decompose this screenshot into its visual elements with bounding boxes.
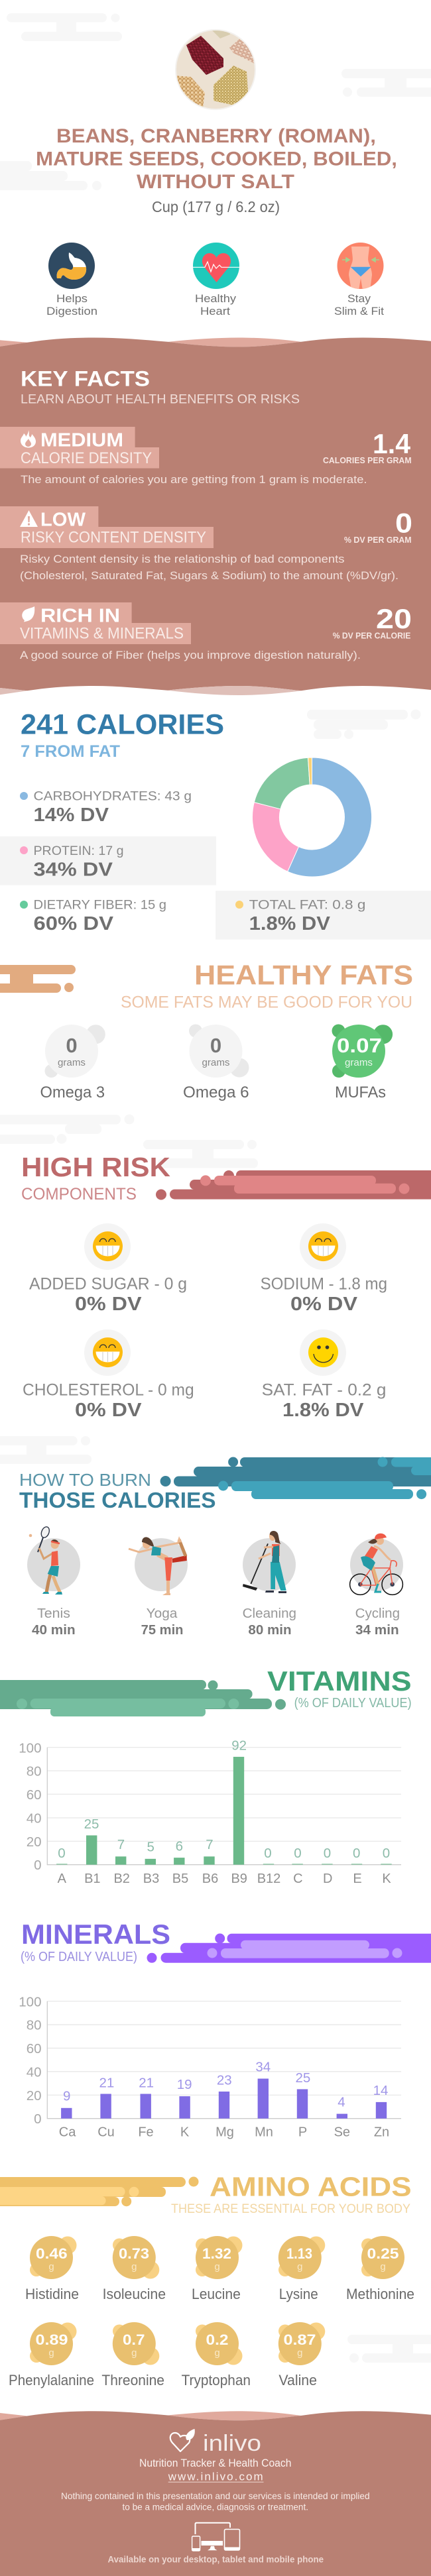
amino acid: leucine (192, 2236, 243, 2302)
activity: cycling: Cycling (355, 1606, 400, 1621)
risk: saturated fat: SAT. FAT - 0.2 g (262, 1381, 386, 1400)
bar chart: minerals: 21 (99, 2075, 114, 2090)
bar chart: minerals: Fe (138, 2125, 154, 2139)
bar chart: minerals: 19 (177, 2077, 192, 2092)
amino acid: leucine: Leucine (192, 2286, 241, 2302)
bar chart: vitamins: 0 (58, 1846, 66, 1861)
benefit: stay slim and fit (334, 243, 384, 317)
decoration: amino acids stripes (0, 2176, 199, 2206)
row: risky content density: (Cholesterol, Saturated Fat, Sugars & Sodium) to the amount (%DV/gr). (20, 569, 399, 582)
bar chart: minerals: 25 (295, 2070, 310, 2086)
title: MATURE SEEDS, COOKED, BOILED, (36, 148, 397, 170)
amino acid: isoleucine (103, 2236, 166, 2302)
benefit: helps digestion (46, 243, 97, 317)
row: risky content density (0, 506, 412, 582)
risk: saturated fat (262, 1329, 386, 1421)
legend: protein (0, 836, 216, 885)
activity: yoga (129, 1536, 188, 1638)
bar chart: minerals: 9 (63, 2088, 70, 2103)
icon: person sweeping (243, 1531, 296, 1593)
bar chart: minerals: Cu (97, 2125, 115, 2139)
amino acid: valine (278, 2322, 325, 2388)
icon: grinning face (308, 1231, 338, 1261)
legend: carbohydrates: 14% DV (33, 805, 109, 826)
bar chart: minerals: Ca (59, 2125, 76, 2139)
benefit: stay slim and fit: Stay (347, 292, 371, 305)
bar chart: vitamins (19, 1738, 401, 1886)
legend: total fat: 1.8% DV (249, 913, 331, 934)
amino acid: histidine: Histidine (25, 2286, 79, 2302)
amino acid: histidine: 0.46 (36, 2245, 68, 2262)
amino acid: methionine (346, 2236, 414, 2302)
benefit: healthy heart (193, 243, 239, 317)
benefit: healthy heart: Healthy (195, 292, 237, 305)
bar chart: vitamins: C (293, 1872, 303, 1886)
bar chart: minerals: K (180, 2125, 190, 2139)
decoration: high risk stripes (156, 1170, 431, 1200)
legend: total fat: TOTAL FAT: 0.8 g (249, 898, 365, 913)
amino acid: lysine: 1.13 (286, 2245, 312, 2262)
icon: smiling face (308, 1337, 338, 1367)
icon: heart with pulse (193, 243, 239, 289)
bar chart: minerals: 14 (373, 2083, 388, 2098)
bar chart: vitamins: B9 (231, 1872, 247, 1886)
logo: inlivo: inlivo (203, 2431, 261, 2456)
legend: dietary fiber: DIETARY FIBER: 15 g (33, 898, 166, 913)
bar chart: minerals: 0 (34, 2111, 41, 2127)
bar chart: vitamins: 40 (27, 1811, 41, 1826)
website link: www.inlivo.com (168, 2470, 263, 2483)
activity: cleaning (243, 1531, 296, 1638)
bar chart: minerals: Mn (255, 2125, 273, 2139)
row: calorie density: The amount of calories you are getting from 1 gram is moderate. (21, 473, 367, 486)
benefit: helps digestion: Digestion (46, 305, 97, 317)
fat: omega 3 (40, 1025, 105, 1101)
amino acid: threonine: g (131, 2347, 137, 2359)
serving size: Cup (177 g / 6.2 oz) (152, 198, 280, 215)
heading: those calories: THOSE CALORIES (19, 1488, 216, 1512)
risk: added sugar (29, 1223, 187, 1315)
row: vitamins and minerals: VITAMINS & MINERALS (20, 625, 184, 643)
risk: cholesterol: CHOLESTEROL - 0 mg (23, 1381, 194, 1400)
legend: carbohydrates (20, 789, 192, 826)
decoration: burn calories stripes (160, 1457, 431, 1499)
bar chart: minerals (19, 1994, 401, 2139)
amino acid: isoleucine: 0.73 (119, 2245, 149, 2262)
amino acid: lysine (278, 2236, 325, 2302)
amino acid: threonine (101, 2322, 164, 2388)
amino acid: phenylalanine (9, 2322, 94, 2388)
fat: mufas: 0.07 (337, 1034, 382, 1057)
activity: yoga: 75 min (141, 1623, 183, 1638)
bar chart: minerals: 20 (27, 2088, 41, 2103)
bar chart: vitamins: 0 (264, 1846, 272, 1861)
risk: sodium (261, 1223, 387, 1315)
risk: added sugar: 0% DV (75, 1294, 142, 1315)
risk: cholesterol (23, 1329, 194, 1421)
row: calorie density: MEDIUM (40, 430, 123, 451)
amino acid: methionine: g (380, 2261, 386, 2272)
activity: tennis: Tenis (37, 1606, 70, 1621)
row: vitamins and minerals: % DV PER CALORIE (333, 632, 410, 641)
heading: key facts: KEY FACTS (21, 366, 150, 390)
decoration: minerals stripes (147, 1934, 431, 1963)
bar chart: vitamins: 7 (206, 1837, 214, 1852)
bar chart: vitamins: 100 (19, 1740, 41, 1756)
heading: calories: 241 CALORIES (21, 709, 224, 741)
amino acid: phenylalanine: Phenylalanine (9, 2372, 94, 2388)
bar chart: minerals: 40 (27, 2065, 41, 2080)
bar chart: minerals: 23 (217, 2072, 232, 2088)
risk: added sugar: ADDED SUGAR - 0 g (29, 1275, 187, 1294)
amino acid: isoleucine: g (131, 2261, 137, 2272)
bar chart: vitamins: B12 (257, 1872, 280, 1886)
donut chart: macronutrients (252, 757, 372, 877)
decoration: vitamins stripes (0, 1680, 286, 1716)
row: calorie density: CALORIE DENSITY (21, 449, 152, 467)
bar chart: vitamins: B2 (113, 1872, 130, 1886)
bar chart: vitamins: 7 (117, 1837, 125, 1852)
icon: person cycling (350, 1534, 403, 1595)
benefit: healthy heart: Heart (200, 305, 230, 317)
bar chart: vitamins: 0 (34, 1858, 41, 1873)
icon: tennis player (27, 1526, 80, 1595)
risk: cholesterol: 0% DV (75, 1400, 142, 1421)
risk: sodium: SODIUM - 1.8 mg (261, 1275, 387, 1294)
bar chart: vitamins: B5 (172, 1872, 188, 1886)
disclaimer (61, 2491, 370, 2512)
activity: cycling (350, 1534, 403, 1638)
fat: omega 6 (183, 1025, 249, 1101)
legend: protein: PROTEIN: 17 g (33, 844, 124, 858)
subheading: LEARN ABOUT HEALTH BENEFITS OR RISKS (21, 392, 300, 407)
legend: dietary fiber (20, 898, 166, 934)
bar chart: vitamins: 6 (176, 1838, 183, 1854)
amino acid: valine: g (297, 2347, 302, 2359)
title: BEANS, CRANBERRY (ROMAN), (56, 125, 376, 147)
row: calorie density: 1.4 (373, 428, 411, 459)
activity: cleaning: 80 min (248, 1623, 292, 1638)
row: risky content density: RISKY CONTENT DENSITY (21, 529, 206, 546)
amino acid: phenylalanine: g (48, 2347, 54, 2359)
row: vitamins and minerals (0, 602, 412, 661)
bar chart: vitamins: 25 (84, 1817, 99, 1832)
row: calorie density (0, 427, 412, 486)
benefit: stay slim and fit: Slim & Fit (334, 305, 384, 317)
amino acid: histidine (25, 2236, 79, 2302)
amino acid: tryptophan: g (214, 2347, 220, 2359)
bar chart: vitamins: 0 (324, 1846, 331, 1861)
row: risky content density: % DV PER GRAM (344, 535, 412, 545)
amino acid: methionine: Methionine (346, 2286, 414, 2302)
bar chart: vitamins: K (382, 1872, 391, 1886)
bar chart: minerals: 60 (27, 2041, 41, 2056)
bar chart: minerals: Zn (374, 2125, 389, 2139)
logo: inlivo (170, 2429, 261, 2456)
risk: sodium: 0% DV (290, 1294, 358, 1315)
amino acid: threonine: 0.7 (123, 2331, 145, 2348)
amino acid: tryptophan: Tryptophan (182, 2372, 251, 2388)
legend: total fat (216, 891, 431, 940)
icon: yoga pose (129, 1536, 188, 1595)
bar chart: minerals: 80 (27, 2018, 41, 2033)
heading: high risk: HIGH RISK (21, 1152, 170, 1182)
bar chart: vitamins: B3 (143, 1872, 159, 1886)
subheading: vitamins: (% OF DAILY VALUE) (294, 1696, 412, 1710)
heading: minerals: MINERALS (21, 1919, 170, 1950)
fat: mufas: grams (345, 1057, 373, 1068)
amino acid: threonine: Threonine (101, 2372, 164, 2388)
heading: how to burn: HOW TO BURN (19, 1470, 151, 1490)
panel: footer (0, 2411, 431, 2576)
bar chart: vitamins: A (58, 1872, 67, 1886)
icon: leaf (22, 606, 34, 622)
bar chart: vitamins: 0 (294, 1846, 302, 1861)
subheading: amino acids: THESE ARE ESSENTIAL FOR YOUR BODY (171, 2202, 410, 2216)
amino acid: histidine: g (48, 2261, 54, 2272)
legend: carbohydrates: CARBOHYDRATES: 43 g (33, 789, 192, 804)
icon: devices (192, 2523, 240, 2551)
activity: cycling: 34 min (355, 1623, 399, 1638)
activity: tennis (27, 1526, 80, 1638)
icon: warning triangle (20, 510, 38, 527)
amino acid: valine: 0.87 (284, 2331, 316, 2348)
benefit: helps digestion: Helps (56, 292, 88, 305)
icon: grinning face (93, 1337, 123, 1367)
heading: healthy fats: HEALTHY FATS (194, 960, 413, 991)
row: vitamins and minerals: 20 (376, 603, 412, 634)
title: WITHOUT SALT (137, 171, 294, 193)
row: risky content density: Risky Content density is the relationship of bad components (20, 553, 345, 565)
bar chart: vitamins: 92 (231, 1738, 247, 1754)
amino acid: leucine: 1.32 (202, 2245, 231, 2262)
bar chart: minerals: Mg (216, 2125, 234, 2139)
icon: stomach (48, 243, 95, 289)
bar chart: vitamins: 60 (27, 1787, 41, 1803)
panel: key facts (0, 338, 431, 695)
bar chart: minerals: 21 (139, 2075, 154, 2090)
bar chart: vitamins: B1 (84, 1872, 101, 1886)
fat: omega 3: 0 (66, 1034, 78, 1057)
row: calorie density: CALORIES PER GRAM (323, 456, 412, 465)
bar chart: minerals: 100 (19, 1994, 41, 2009)
disclaimer: to be a medical advice, diagnosis or treatment. (122, 2502, 308, 2512)
title (36, 125, 397, 193)
activity: tennis: 40 min (32, 1623, 76, 1638)
bar chart: vitamins: D (323, 1872, 332, 1886)
amino acid: phenylalanine: 0.89 (36, 2331, 68, 2348)
fat: omega 6: grams (202, 1057, 229, 1068)
row: vitamins and minerals: RICH IN (40, 605, 120, 626)
heading: amino acids: AMINO ACIDS (210, 2171, 412, 2202)
activity: cleaning: Cleaning (243, 1606, 296, 1621)
fat: omega 3: Omega 3 (40, 1084, 105, 1101)
row: risky content density: LOW (40, 510, 86, 531)
fat: mufas: MUFAs (335, 1084, 386, 1101)
fat: omega 3: grams (58, 1057, 86, 1068)
amino acid: lysine: g (297, 2261, 302, 2272)
row: risky content density: 0 (395, 507, 412, 538)
icon: waist (337, 243, 383, 290)
decoration: healthy fats stripes (0, 965, 76, 993)
availability note: Available on your desktop, tablet and mobile phone (107, 2554, 324, 2565)
fat: omega 6: 0 (210, 1034, 221, 1057)
risk: saturated fat: 1.8% DV (282, 1400, 364, 1421)
amino acid: valine: Valine (278, 2372, 317, 2388)
bar chart: vitamins: 5 (147, 1839, 154, 1854)
subheading: minerals: (% OF DAILY VALUE) (21, 1950, 137, 1964)
subheading: from fat: 7 FROM FAT (21, 742, 120, 761)
amino acid: tryptophan (182, 2322, 251, 2388)
subheading: components: COMPONENTS (21, 1185, 137, 1204)
bar chart: vitamins: E (353, 1872, 362, 1886)
amino acid: methionine: 0.25 (367, 2245, 399, 2262)
amino acid: tryptophan: 0.2 (206, 2331, 228, 2348)
bar chart: minerals: Se (334, 2125, 350, 2139)
bar chart: vitamins: 0 (383, 1846, 390, 1861)
legend: dietary fiber: 60% DV (33, 913, 114, 934)
heading: vitamins: VITAMINS (267, 1665, 412, 1697)
legend: protein: 34% DV (33, 860, 113, 881)
bar chart: minerals: 4 (338, 2094, 345, 2109)
bar chart: vitamins: 0 (353, 1846, 360, 1861)
amino acid: leucine: g (214, 2261, 220, 2272)
fat: omega 6: Omega 6 (183, 1084, 249, 1101)
tagline: Nutrition Tracker & Health Coach (139, 2457, 292, 2469)
disclaimer: Nothing contained in this presentation and our services is intended or implied (61, 2491, 370, 2501)
amino acid: lysine: Lysine (279, 2286, 318, 2302)
bar chart: minerals: P (298, 2125, 307, 2139)
bar chart: vitamins: B6 (202, 1872, 218, 1886)
subheading: healthy fats: SOME FATS MAY BE GOOD FOR YOU (121, 993, 412, 1012)
fat: mufas (332, 1025, 393, 1101)
icon: grinning face (93, 1231, 123, 1261)
bar chart: vitamins: 20 (27, 1834, 41, 1850)
icon: flame (21, 430, 36, 448)
photo: sacks of beans (174, 29, 256, 110)
row: vitamins and minerals: A good source of Fiber (helps you improve digestion naturally). (20, 649, 361, 661)
activity: yoga: Yoga (147, 1606, 178, 1621)
bar chart: vitamins: 80 (27, 1764, 41, 1779)
bar chart: minerals: 34 (255, 2060, 271, 2075)
amino acid: isoleucine: Isoleucine (103, 2286, 166, 2302)
